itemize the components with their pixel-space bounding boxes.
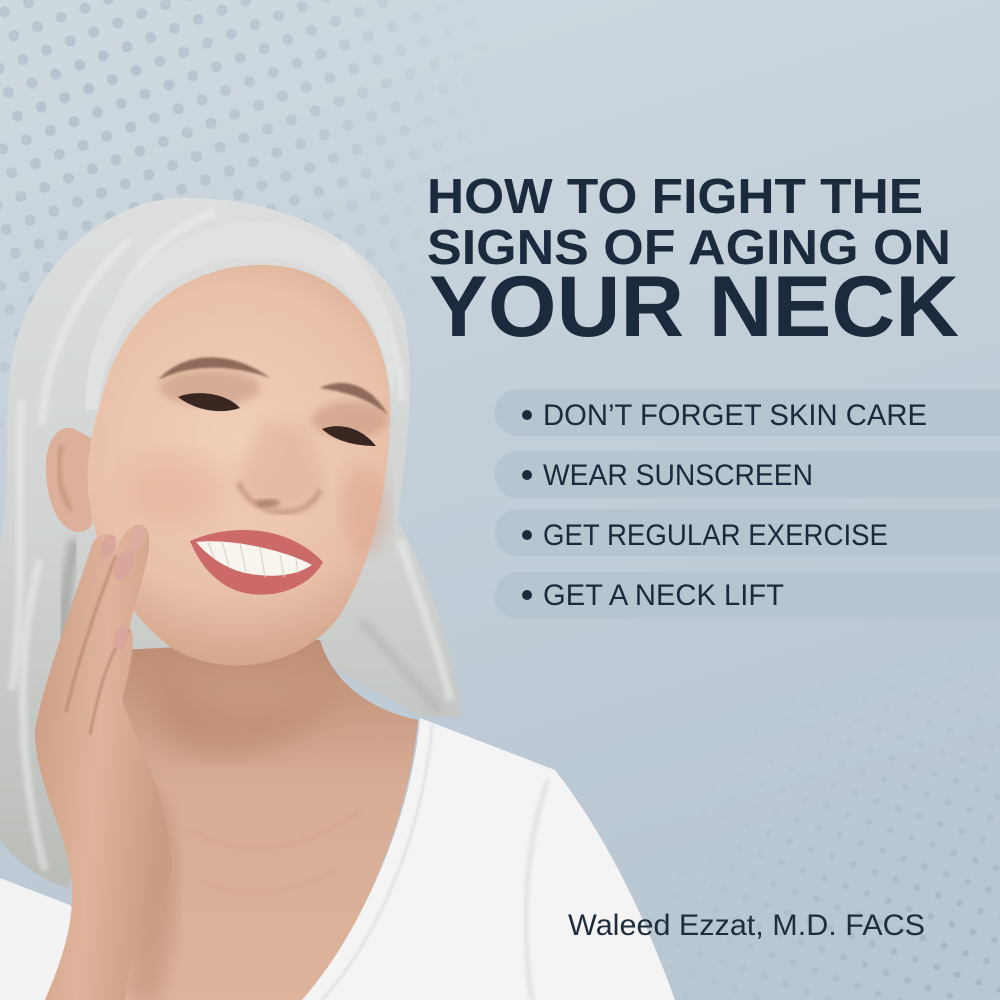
tip: neck lift — [494, 572, 1000, 619]
tip: neck lift: GET A NECK LIFT — [543, 579, 784, 612]
lips — [190, 530, 323, 595]
tip: skin care — [494, 389, 1000, 436]
neck shadow — [150, 660, 335, 756]
shirt — [0, 878, 150, 1000]
eye shadow — [160, 370, 260, 406]
eyebrow: left — [158, 357, 270, 380]
tip: exercise — [494, 509, 1000, 556]
photo: woman — [0, 198, 675, 1000]
dot pattern: bottom right — [774, 766, 1000, 1000]
teeth — [196, 541, 312, 577]
neck wrinkles — [190, 810, 360, 892]
eye: left — [178, 393, 240, 411]
face — [88, 265, 390, 665]
eye: right — [322, 426, 376, 446]
title — [427, 170, 959, 355]
nose — [236, 420, 321, 512]
hair — [0, 198, 462, 888]
tip: exercise: GET REGULAR EXERCISE — [543, 519, 888, 552]
author credit: Waleed Ezzat, M.D. FACS — [568, 909, 925, 942]
cheek blush — [125, 454, 225, 526]
tip: sunscreen: WEAR SUNSCREEN — [543, 459, 813, 492]
dot pattern: top left — [0, 0, 407, 372]
tip: sunscreen — [494, 451, 1000, 498]
hair over forehead — [85, 222, 394, 410]
title: HOW TO FIGHT THE — [427, 170, 923, 224]
neck — [60, 640, 418, 1000]
tip: skin care: DON’T FORGET SKIN CARE — [543, 399, 927, 432]
eyebrow: right — [320, 383, 388, 415]
list of tips — [494, 389, 1000, 619]
title: SIGNS OF AGING ON — [427, 221, 951, 275]
fingernails — [97, 532, 119, 562]
ear — [46, 428, 95, 532]
title: YOUR NECK — [429, 259, 959, 355]
hand — [35, 524, 172, 1000]
